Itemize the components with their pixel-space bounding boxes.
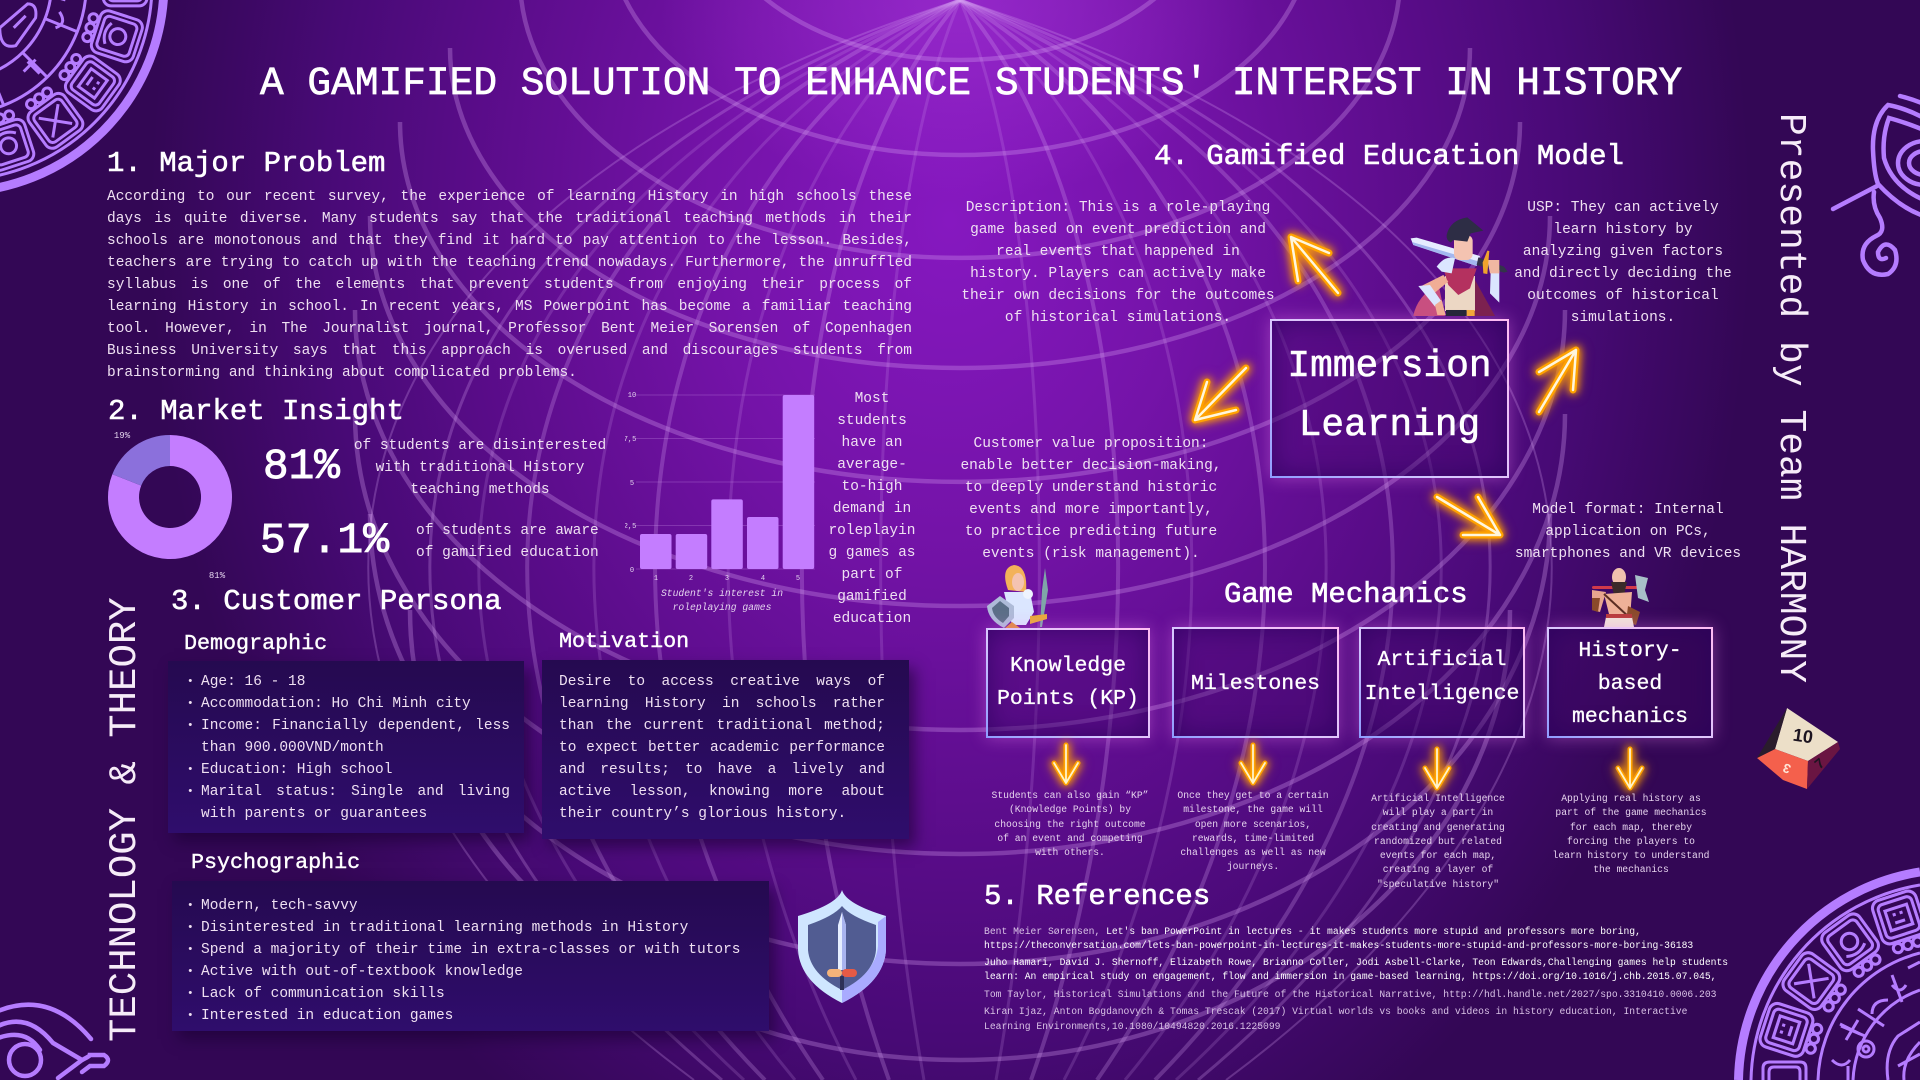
heading: psychographic: Psychographic [191, 850, 360, 875]
psychographic list: Spend a majority of their time in extra-classes or with tutors [201, 942, 740, 958]
text: knowledge points description: (Knowledge Points) by [1009, 804, 1131, 815]
text: usp: outcomes of historical [1527, 288, 1719, 304]
donut chart: 81% / 19%: 81% [209, 571, 226, 581]
text: major problem paragraph: According to our recent survey, the experience of learning History in high schools these [107, 189, 912, 205]
panel: psychographic [172, 881, 769, 1031]
text: most students: education [833, 611, 911, 627]
text: description: of historical simulations. [1005, 310, 1231, 326]
text: description: real events that happened in [996, 244, 1240, 260]
psychographic list: Active with out-of-textbook knowledge [201, 964, 523, 980]
text: most students: to-high [842, 479, 902, 495]
text: aware of gamified education: of students are aware [416, 523, 599, 539]
text: description [961, 200, 1275, 326]
text: usp [1514, 200, 1732, 326]
text: most students: Most [855, 391, 889, 407]
text: reference list: Kiran Ijaz, Anton Bogdanovych & Tomas Trescak (2017) Virtual worlds vs books and videos in history education, Interactive [984, 1006, 1687, 1017]
box: artificial intelligence [1359, 627, 1525, 738]
demographic list: Age: 16 - 18 [201, 674, 305, 690]
box: history-based mechanics [1547, 627, 1713, 738]
text: most students: demand in [833, 501, 911, 517]
box: knowledge points: Points (KP) [997, 687, 1139, 711]
arrow: to description [1279, 226, 1348, 304]
heading: 5. references: 5. References [984, 880, 1210, 913]
arrow: to customer value [1184, 357, 1257, 432]
icon: ten-sided die: 3 [1781, 760, 1793, 777]
text: reference list: Tom Taylor, Historical Simulations and the Future of the Historical Narrative, http://hdl.handle.net/2027/spo.3310410.0006.203 [984, 989, 1716, 1000]
arrow: to model format [1426, 486, 1511, 548]
text: usp: and directly deciding the [1514, 266, 1732, 282]
text: most students: average- [837, 457, 907, 473]
text: knowledge points description [992, 790, 1148, 858]
motivation text: than the current traditional method; [559, 718, 885, 734]
character: barbarian with axe [1592, 568, 1649, 627]
box: immersion learning: Immersion [1287, 346, 1492, 388]
text: milestones description: challenges as well as new [1180, 847, 1326, 858]
motivation text: their country’s glorious history. [559, 806, 846, 822]
text: artificial intelligence description [1371, 793, 1505, 890]
motivation text: active lesson, knowing more about [559, 784, 885, 800]
text: usp: simulations. [1571, 310, 1675, 326]
text: customer value proposition [960, 436, 1222, 562]
text: customer value proposition: events and more importantly, [969, 502, 1213, 518]
text: customer value proposition: enable better decision-making, [960, 458, 1222, 474]
text: description: Description: This is a role-playing [966, 200, 1270, 216]
text: artificial intelligence description: will play a part in [1383, 807, 1493, 818]
text: reference list [984, 926, 1728, 1032]
demographic list: Education: High school [201, 762, 392, 778]
text: milestones description: open more scenarios, [1195, 819, 1311, 830]
bar chart: interest in roleplaying games: 0 [630, 567, 634, 575]
text: customer value proposition: Customer value proposition: [974, 436, 1208, 452]
text: major problem paragraph: syllabus is one of the elements that prevent students from enjoying their process of [107, 277, 912, 293]
icon: ten-sided die: 10 [1792, 725, 1814, 747]
text: most students: students [837, 413, 907, 429]
icon: shield with sword [798, 890, 886, 1003]
psychographic list: Modern, tech-savvy [201, 898, 358, 914]
motivation text: and results; to have a lively and [559, 762, 885, 778]
text: most students: have an [842, 435, 902, 451]
box: milestones [1172, 627, 1339, 738]
psychographic list: Disinterested in traditional learning methods in History [201, 920, 688, 936]
text: customer value proposition: to deeply understand historic [965, 480, 1217, 496]
text: major problem paragraph: schools are monotonous and that they find it hard to pay attention to the lesson. Besides, [107, 233, 912, 249]
text: major problem paragraph: brainstorming and thinking about complicated problems. [107, 365, 577, 381]
text: major problem paragraph: tool. However, in The Journalist journal, Professor Bent Meier Sorensen of Copenhagen [107, 321, 912, 337]
stat: 81%: 81% [263, 442, 340, 491]
arrow: down from knowledge points [1044, 736, 1088, 792]
bar chart: interest in roleplaying games: 4 [761, 575, 765, 583]
text: disinterested students: teaching methods [410, 482, 550, 498]
text: major problem paragraph: teachers are trying to catch up with the teaching trend nowadays. Furthermore, the unruffled [107, 255, 912, 271]
bar chart: interest in roleplaying games: 5 [796, 575, 800, 583]
donut chart: 81% / 19% [108, 431, 232, 581]
heading: game mechanics: Game Mechanics [1224, 578, 1468, 611]
text: knowledge points description: choosing the right outcome [994, 819, 1146, 830]
motivation text: learning History in schools rather [559, 696, 885, 712]
text: knowledge points description: with others. [1035, 847, 1105, 858]
character: knight with shield [987, 565, 1048, 628]
text: description: history. Players can actively make [970, 266, 1266, 282]
text: customer value proposition: events (risk management). [982, 546, 1200, 562]
text: disinterested students: with traditional History [376, 460, 584, 476]
box: knowledge points: Knowledge [1010, 654, 1126, 678]
bar chart: interest in roleplaying games: 3 [725, 575, 729, 583]
text: most students: roleplayin [828, 523, 916, 539]
box: history-based mechanics: mechanics [1572, 704, 1688, 728]
text: history mechanics description: learn history to understand [1553, 850, 1709, 861]
text: artificial intelligence description: creating a layer of [1383, 864, 1493, 875]
text: major problem paragraph: Business University says that this approach is overused and discourages students from [107, 343, 912, 359]
demographic list [188, 674, 510, 822]
text: customer value proposition: to practice predicting future [965, 524, 1217, 540]
text: reference list: Juho Hamari, David J. Shernoff, Elizabeth Rowe, Brianno Coller, Jodi Asbell-Clarke, Teon Edwards,Challenging games help students [984, 957, 1728, 968]
text: history mechanics description: part of the game mechanics [1555, 807, 1707, 818]
panel: motivation [542, 660, 909, 839]
character: hero with sword [1410, 217, 1508, 316]
box: milestones: Milestones [1191, 672, 1320, 696]
text: milestones description: rewards, time-limited [1192, 833, 1314, 844]
bar chart: interest in roleplaying games: 10 [628, 392, 636, 400]
bar chart: interest in roleplaying games: 1 [654, 575, 658, 583]
psychographic list: Interested in education games [201, 1008, 453, 1024]
text: model format: Model format: Internal [1532, 502, 1724, 518]
text: model format [1515, 502, 1741, 562]
motivation text [559, 674, 885, 822]
box: immersion learning: Learning [1299, 405, 1480, 447]
text: most students: part of [842, 567, 902, 583]
box: history-based mechanics: based [1598, 672, 1662, 696]
box: immersion learning [1270, 319, 1509, 478]
text: artificial intelligence description: Artificial Intelligence [1371, 793, 1505, 804]
text: most students: g games as [828, 545, 916, 561]
decoration: bottom-left eye [0, 1002, 110, 1080]
text: artificial intelligence description: creating and generating [1371, 822, 1505, 833]
bar chart: interest in roleplaying games: roleplaying games [673, 602, 772, 613]
arrow: to usp [1528, 339, 1588, 423]
text: knowledge points description: of an event and competing [997, 833, 1143, 844]
psychographic list: Lack of communication skills [201, 986, 445, 1002]
demographic list: than 900.000VND/month [201, 740, 384, 756]
decoration: top-left calendar disc [0, 0, 168, 192]
donut chart: 81% / 19%: 19% [114, 431, 131, 441]
arrow: down from history mechanics [1608, 740, 1652, 798]
decoration: bottom-right calendar disc [1734, 868, 1920, 1080]
motivation text: to expect better academic performance [559, 740, 885, 756]
text: milestones description: Once they get to a certain [1177, 790, 1329, 801]
psychographic list [188, 898, 740, 1024]
box: artificial intelligence: Artificial [1377, 648, 1506, 672]
text: usp: USP: They can actively [1527, 200, 1719, 216]
arrow: down from artificial intelligence [1416, 740, 1458, 798]
text: history mechanics description [1553, 793, 1709, 875]
icon: ten-sided die [1757, 708, 1840, 789]
text: major problem paragraph: learning History in school. In recent years, MS Powerpoint has become a familiar teaching [107, 299, 912, 315]
text: disinterested students: of students are disinterested [354, 438, 606, 454]
text: history mechanics description: for each map, thereby [1570, 822, 1692, 833]
text: major problem paragraph: days is quite diverse. Many students say that the traditional teaching methods in their [107, 211, 912, 227]
text: reference list: Bent Meier Sørensen, Let's ban PowerPoint in lectures - it makes students more stupid and professors more boring, [984, 926, 1641, 937]
text: milestones description: journeys. [1227, 861, 1279, 872]
arrow: down from milestones [1232, 736, 1274, 792]
heading: 3. Customer Persona: 3. Customer Persona [171, 585, 502, 618]
bar chart: interest in roleplaying games: Student's interest in [661, 588, 783, 599]
text: model format: application on PCs, [1545, 524, 1711, 540]
text: history mechanics description: Applying real history as [1561, 793, 1701, 804]
box: history-based mechanics: History- [1578, 638, 1682, 662]
text: disinterested students [354, 438, 606, 498]
text: description: game based on event prediction and [970, 222, 1266, 238]
demographic list: Accommodation: Ho Chi Minh city [201, 696, 471, 712]
demographic list: Marital status: Single and living [201, 784, 510, 800]
side label: technology and theory: TECHNOLOGY & THEORY [103, 597, 147, 1042]
text: major problem paragraph [107, 189, 912, 381]
bar chart: interest in roleplaying games [625, 392, 815, 613]
side label: presented by team harmony: Presented by Team HARMONY [1769, 113, 1812, 683]
bar chart: interest in roleplaying games: 5 [630, 480, 634, 488]
heading: 2. Market Insight: 2. Market Insight [108, 395, 404, 428]
text: reference list: learn: An empirical study on engagement, flow and immersion in game-based learning, https://doi.org/10.1016/j.chb.2015.07.045, [984, 971, 1716, 982]
text: usp: analyzing given factors [1523, 244, 1723, 260]
text: most students [828, 391, 916, 627]
text: aware of gamified education [416, 523, 599, 561]
text: milestones description: milestone, the game will [1183, 804, 1323, 815]
text: usp: learn history by [1553, 222, 1693, 238]
motivation text: Desire to access creative ways of [559, 674, 885, 690]
text: most students: gamified [837, 589, 907, 605]
demographic list: with parents or guarantees [201, 806, 427, 822]
text: reference list: https://theconversation.com/lets-ban-powerpoint-in-lectures-it-makes-students-more-stupid-and-professors-more-boring-36183 [984, 940, 1693, 951]
heading: 1. Major Problem: 1. Major Problem [107, 147, 385, 180]
text: reference list: Learning Environments,10.1080/10494820.2016.1225099 [984, 1021, 1280, 1032]
text: model format: smartphones and VR devices [1515, 546, 1741, 562]
text: history mechanics description: the mechanics [1593, 864, 1669, 875]
decoration: top-right eye [1830, 94, 1920, 277]
text: description: their own decisions for the outcomes [961, 288, 1275, 304]
title: A GAMIFIED SOLUTION TO ENHANCE STUDENTS' INTEREST IN HISTORY [260, 61, 1682, 106]
heading: motivation: Motivation [559, 629, 689, 654]
panel: demographic [168, 661, 524, 833]
heading: demographic: Demographic [184, 631, 327, 656]
text: milestones description [1177, 790, 1329, 872]
demographic list: Income: Financially dependent, less [201, 718, 510, 734]
bar chart: interest in roleplaying games: 2 [689, 575, 693, 583]
text: artificial intelligence description: randomized but related [1374, 836, 1502, 847]
icon: ten-sided die: 7 [1811, 754, 1828, 772]
text: knowledge points description: Students can also gain “KP” [992, 790, 1148, 801]
stat: 57.1%: 57.1% [260, 516, 389, 565]
text: history mechanics description: forcing the players to [1567, 836, 1695, 847]
heading: 4. gamified education model: 4. Gamified Education Model [1154, 140, 1624, 173]
text: artificial intelligence description: events for each map, [1380, 850, 1496, 861]
box: artificial intelligence: Intelligence [1365, 682, 1519, 706]
text: artificial intelligence description: "speculative history" [1377, 879, 1499, 890]
box: knowledge points [986, 628, 1150, 738]
text: aware of gamified education: of gamified education [416, 545, 599, 561]
